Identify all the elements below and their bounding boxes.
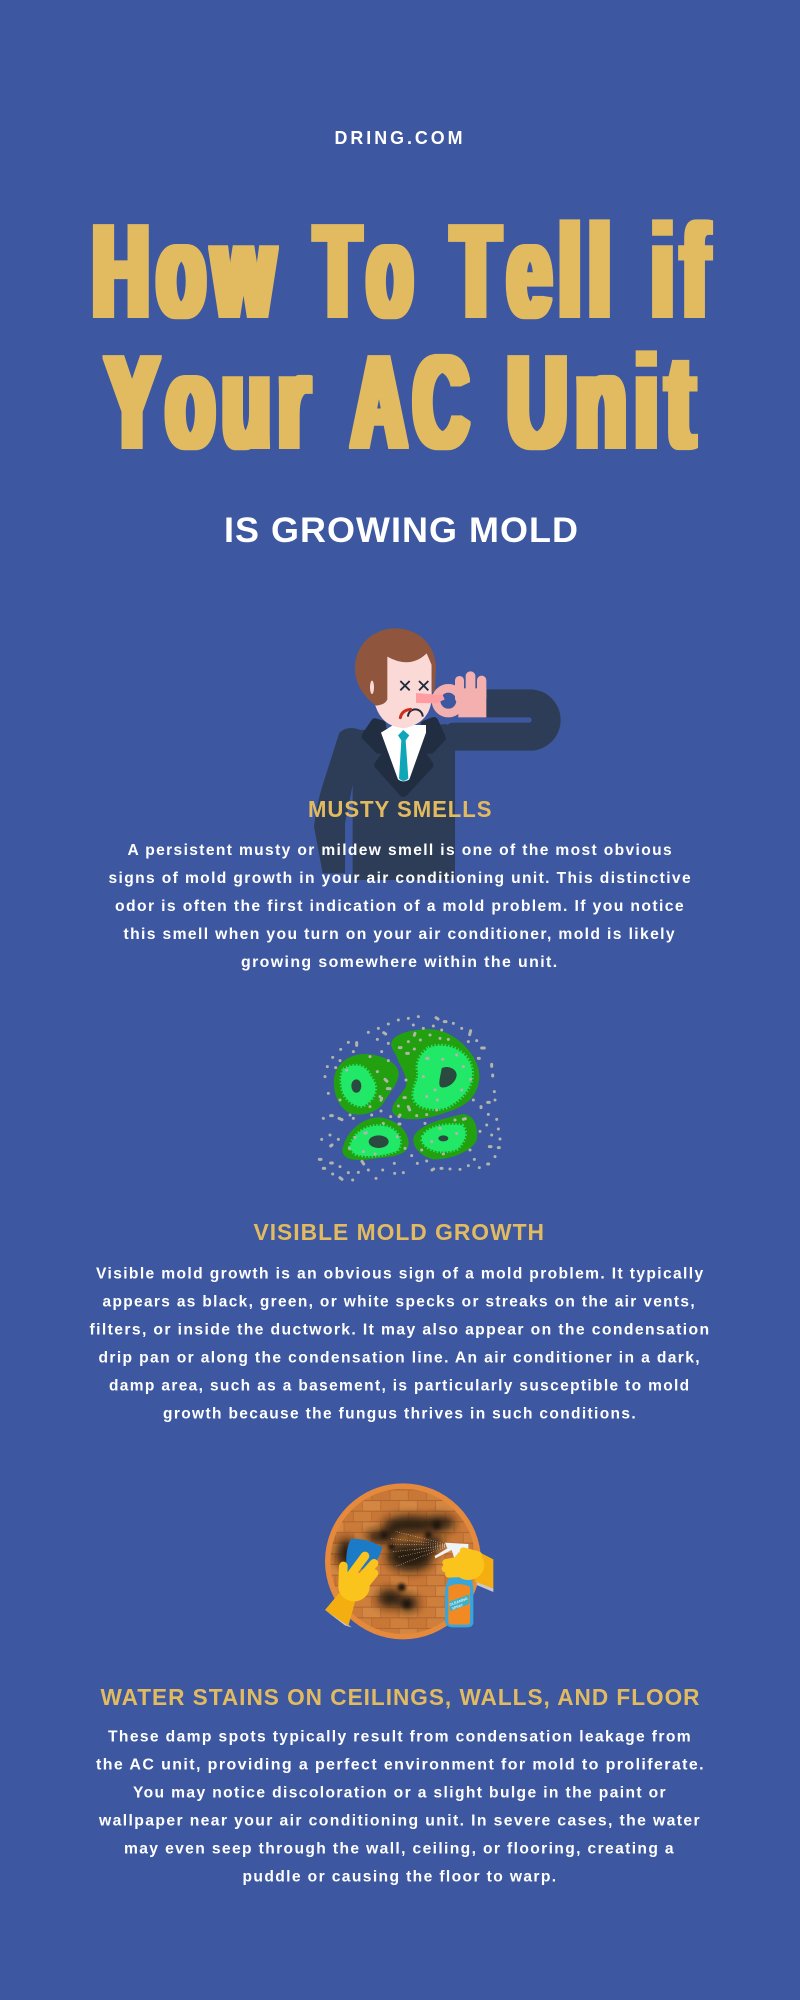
text block: water stains: puddle or causing the floor to warp.	[242, 1868, 558, 1886]
text block: visible mold growth: filters, or inside the ductwork. It may also appear on the condensation	[90, 1322, 710, 1338]
text block: visible mold growth: appears as black, green, or white specks or streaks on the air vents,	[102, 1294, 696, 1310]
text block: musty smells: signs of mold growth in your air conditioning unit. This distinctive	[108, 870, 692, 887]
heading: water stains: WATER STAINS ON CEILINGS, WALLS, AND FLOOR	[100, 1684, 700, 1710]
illustration: mold colonies	[319, 1017, 500, 1180]
man: jacket lapels	[366, 721, 441, 793]
subtitle: IS GROWING MOLD	[224, 511, 579, 550]
cleaning: spray bottle	[435, 1543, 473, 1627]
cleaning: trigger nozzle	[435, 1543, 468, 1561]
site name: DRING.COM	[334, 128, 466, 148]
text block: water stains: wallpaper near your air conditioning unit. In severe cases, the water	[98, 1812, 701, 1830]
illustration: cleaning mold off brick wall	[325, 1483, 493, 1639]
man: face	[374, 652, 432, 728]
illustration: man pinching his nose	[314, 628, 561, 880]
text block: visible mold growth	[90, 1266, 710, 1422]
cleaning: spray bottle: SPRAY	[452, 1603, 464, 1611]
text block: water stains: These damp spots typically result from condensation leakage from	[108, 1728, 692, 1746]
mold: left colony	[334, 1054, 399, 1115]
man: tongue	[400, 709, 411, 718]
text block: water stains: the AC unit, providing a perfect environment for mold to proliferate.	[96, 1756, 705, 1774]
text block: visible mold growth: damp area, such as a basement, is particularly susceptible to mold	[109, 1378, 690, 1394]
title: if	[652, 198, 716, 344]
man: nose	[416, 693, 445, 703]
man: ear	[370, 681, 374, 694]
text block: water stains	[96, 1728, 705, 1886]
text block: visible mold growth: growth because the fungus thrives in such conditions.	[163, 1406, 637, 1422]
cleaning: blue sponge	[346, 1539, 382, 1573]
cleaning: brick wall	[327, 1487, 480, 1637]
text block: musty smells: this smell when you turn on your air conditioner, mold is likely	[124, 926, 676, 943]
man: suit torso	[353, 724, 455, 880]
mold: bottom left colony	[342, 1117, 409, 1160]
text block: visible mold growth: Visible mold growth is an obvious sign of a mold problem. It typically	[96, 1266, 704, 1282]
man: frown	[408, 709, 423, 717]
cleaning: orange wall ring	[325, 1483, 481, 1639]
man: white shirt	[381, 725, 426, 781]
man: teal tie	[398, 730, 409, 781]
text block: musty smells	[108, 842, 692, 971]
heading: musty smells: MUSTY SMELLS	[308, 796, 492, 822]
text block: water stains: may even seep through the wall, ceiling, or flooring, creating a	[124, 1840, 675, 1858]
text block: musty smells: A persistent musty or mildew smell is one of the most obvious	[128, 842, 673, 859]
text block: visible mold growth: drip pan or along the condensation line. An air conditioner in a dark,	[98, 1350, 701, 1366]
title: AC	[352, 328, 476, 476]
heading: visible mold growth: VISIBLE MOLD GROWTH	[254, 1219, 545, 1245]
text block: musty smells: growing somewhere within the unit.	[241, 954, 558, 971]
cleaning: spray mist	[390, 1531, 445, 1567]
title: Tell	[452, 198, 619, 344]
mold: top right colony	[391, 1029, 479, 1119]
mold: scattered spores	[319, 1017, 500, 1180]
man: hair	[355, 628, 436, 706]
text block: water stains: You may notice discoloration or a slight bulge in the paint or	[133, 1784, 667, 1802]
title: To	[315, 198, 420, 344]
mold: bottom right colony	[413, 1114, 477, 1159]
cleaning: left yellow glove	[325, 1556, 374, 1627]
cleaning: right yellow glove	[445, 1550, 493, 1592]
man: left arm	[314, 728, 365, 873]
text block: musty smells: odor is often the first indication of a mold problem. If you notice	[115, 898, 685, 915]
title: Your	[106, 328, 317, 476]
title: How	[93, 198, 282, 344]
man: hand pinching	[436, 671, 486, 717]
man: crossed-out eyes	[400, 681, 428, 690]
cleaning: mold stains	[337, 1515, 455, 1611]
man: right arm bent to nose	[446, 689, 561, 751]
cleaning: bottle label: CLEANING	[449, 1597, 468, 1607]
title	[93, 198, 716, 476]
